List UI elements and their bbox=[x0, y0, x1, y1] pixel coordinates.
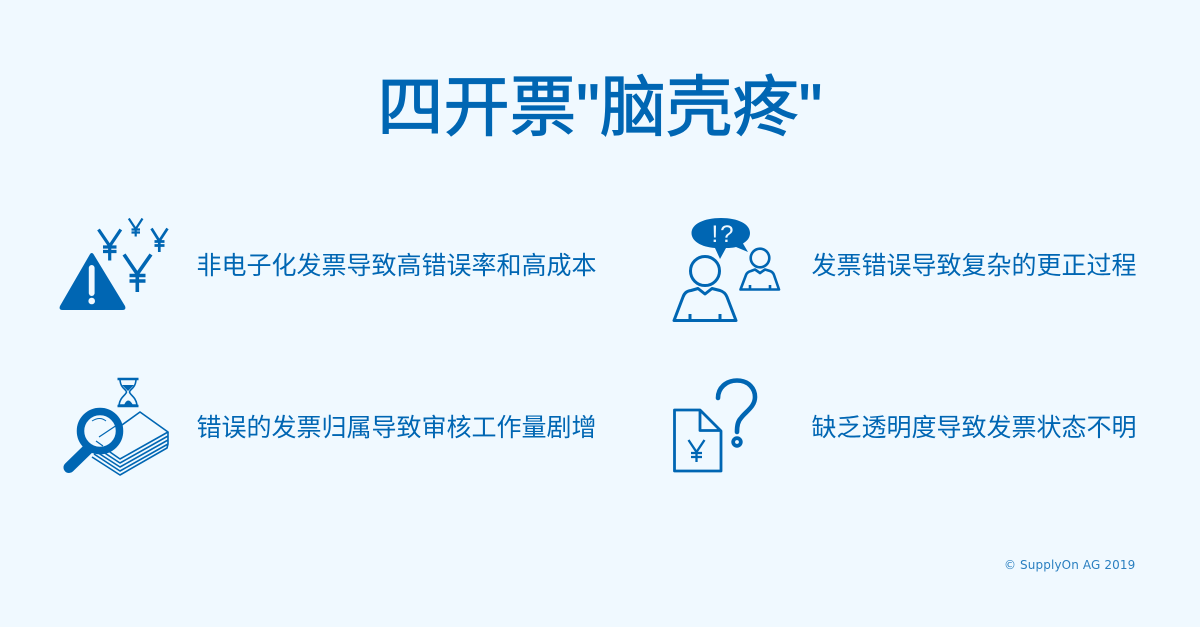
text: lack of transparency: 缺乏透明度导致发票状态不明 bbox=[812, 414, 1137, 442]
text: complex correction: 发票错误导致复杂的更正过程 bbox=[812, 252, 1137, 280]
title: 四开票"脑壳疼" bbox=[377, 70, 823, 144]
text: audit workload: 错误的发票归属导致审核工作量剧增 bbox=[196, 414, 597, 442]
copyright: © SupplyOn AG 2019 bbox=[1004, 558, 1135, 572]
icon: two people with speech bubble: !? bbox=[711, 221, 736, 248]
text: high error rate: 非电子化发票导致高错误率和高成本 bbox=[196, 252, 597, 280]
